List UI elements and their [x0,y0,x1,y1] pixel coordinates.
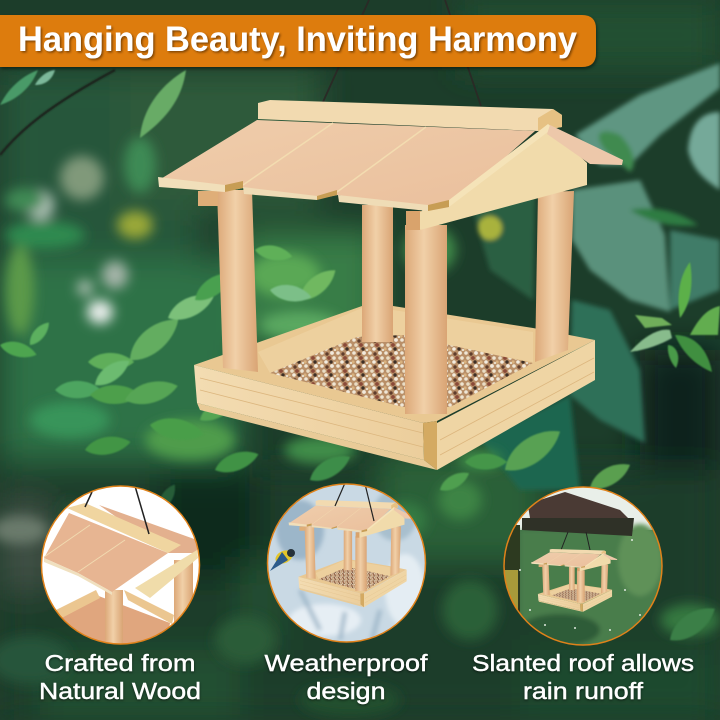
icon: blue tit bird [270,548,295,571]
mid-focus leaves, left [0,243,720,648]
feature 3 label: Slanted roof allows [472,650,694,676]
feature 2: weatherproof circle [268,483,426,642]
feature 1 label [39,650,201,704]
feature 1 label: Natural Wood [39,678,201,704]
main product: wooden bird feeder [158,100,623,470]
hanging wires [323,0,481,106]
title banner [0,15,596,67]
feature 2 label: Weatherproof [264,650,428,676]
feature 3 label [472,650,694,704]
feature 3: rain runoff circle [503,486,663,646]
feature 1 label: Crafted from [44,650,196,676]
feature 3 label: rain runoff [523,678,644,704]
feature 1: natural wood circle [40,486,200,650]
title text: Hanging Beauty, Inviting Harmony [18,20,578,59]
blurred big leaves, right [470,63,720,490]
feature 2 label: design [306,678,386,704]
feature 2 label [264,650,428,704]
